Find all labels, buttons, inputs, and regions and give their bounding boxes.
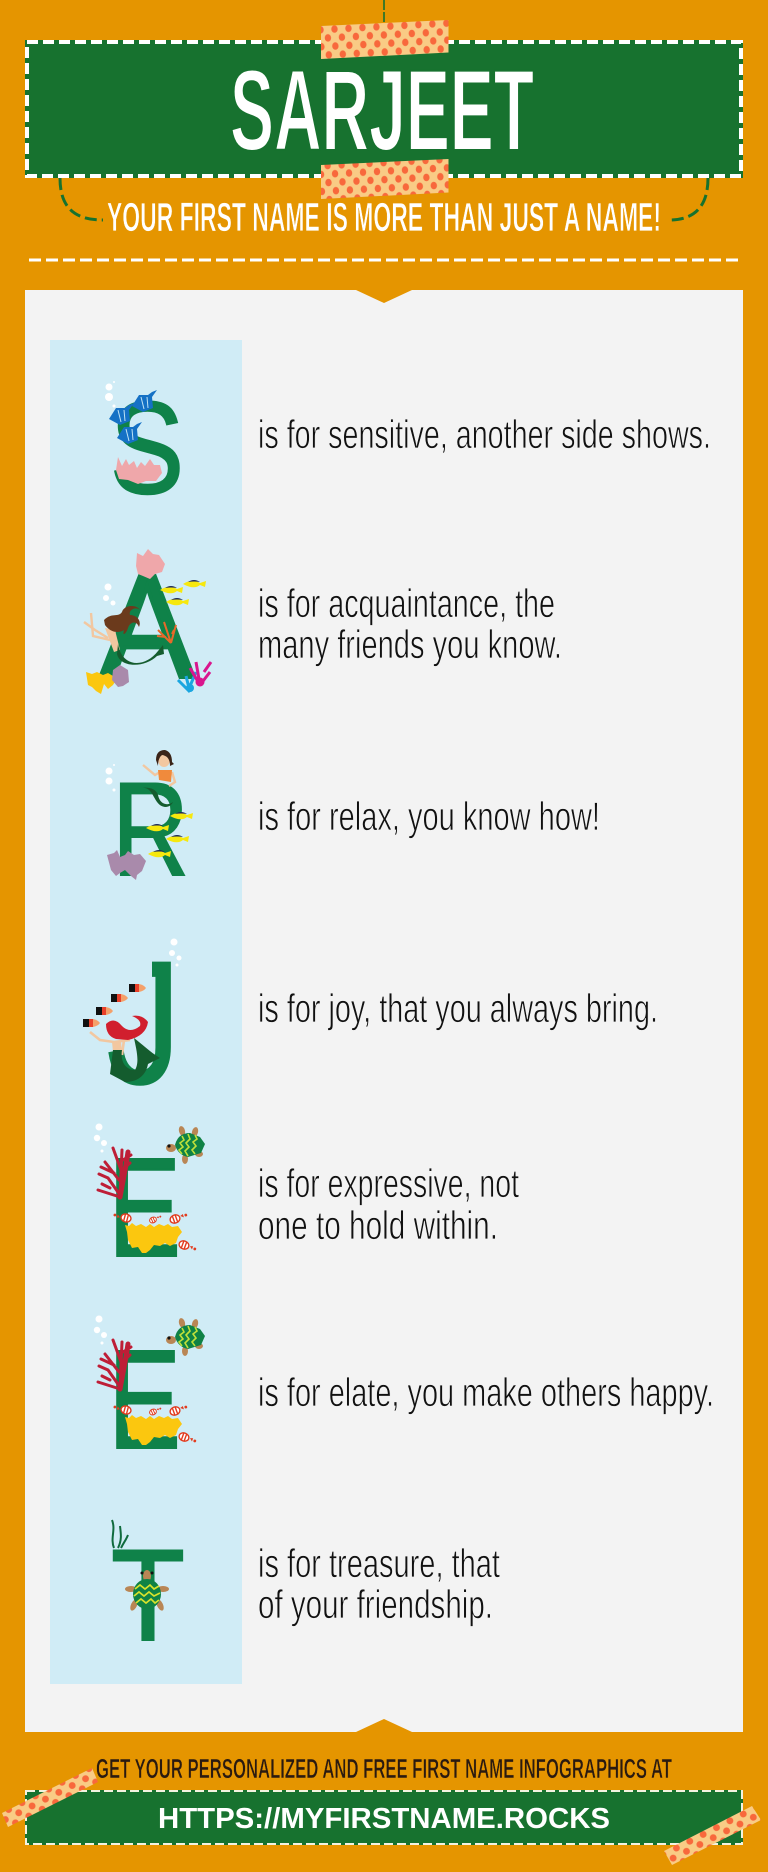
tape: footer left (2, 1768, 98, 1827)
letter A illustration: A (100, 545, 194, 709)
title text: SARJEET (230, 47, 534, 175)
tape: banner bottom (321, 159, 448, 199)
text: E: one to hold within. (258, 1204, 498, 1248)
letter column (50, 340, 242, 1684)
letter R illustration: R (112, 756, 189, 904)
dashed bracket left (60, 178, 103, 220)
text: T: is for treasure, that (258, 1542, 500, 1586)
letter T illustration: T (111, 1522, 185, 1668)
url text: HTTPS://MYFIRSTNAME.ROCKS (158, 1803, 610, 1835)
text: A: many friends you know. (258, 623, 562, 667)
dashed bracket right (669, 178, 708, 220)
text: T: of your friendship. (258, 1583, 493, 1627)
text: T (258, 1542, 500, 1627)
divider dashed (29, 258, 739, 262)
letter S illustration: S (110, 374, 184, 521)
tape: banner top (321, 20, 448, 59)
hanging string (383, 0, 385, 24)
title banner (25, 40, 743, 178)
text: A: is for acquaintance, the (258, 582, 555, 626)
paper panel (25, 290, 743, 1732)
text: E: is for expressive, not (258, 1162, 519, 1206)
letter J illustration: J (107, 926, 181, 1121)
tape: footer right (664, 1806, 761, 1865)
letter J illustration (83, 926, 182, 1121)
text: R: is for relax, you know how! (258, 795, 600, 839)
letter E illustration second: E (108, 1320, 181, 1478)
letter E illustration: E (108, 1128, 181, 1286)
footer url banner (25, 1790, 743, 1845)
text: E (258, 1162, 519, 1248)
text: A (258, 582, 562, 667)
